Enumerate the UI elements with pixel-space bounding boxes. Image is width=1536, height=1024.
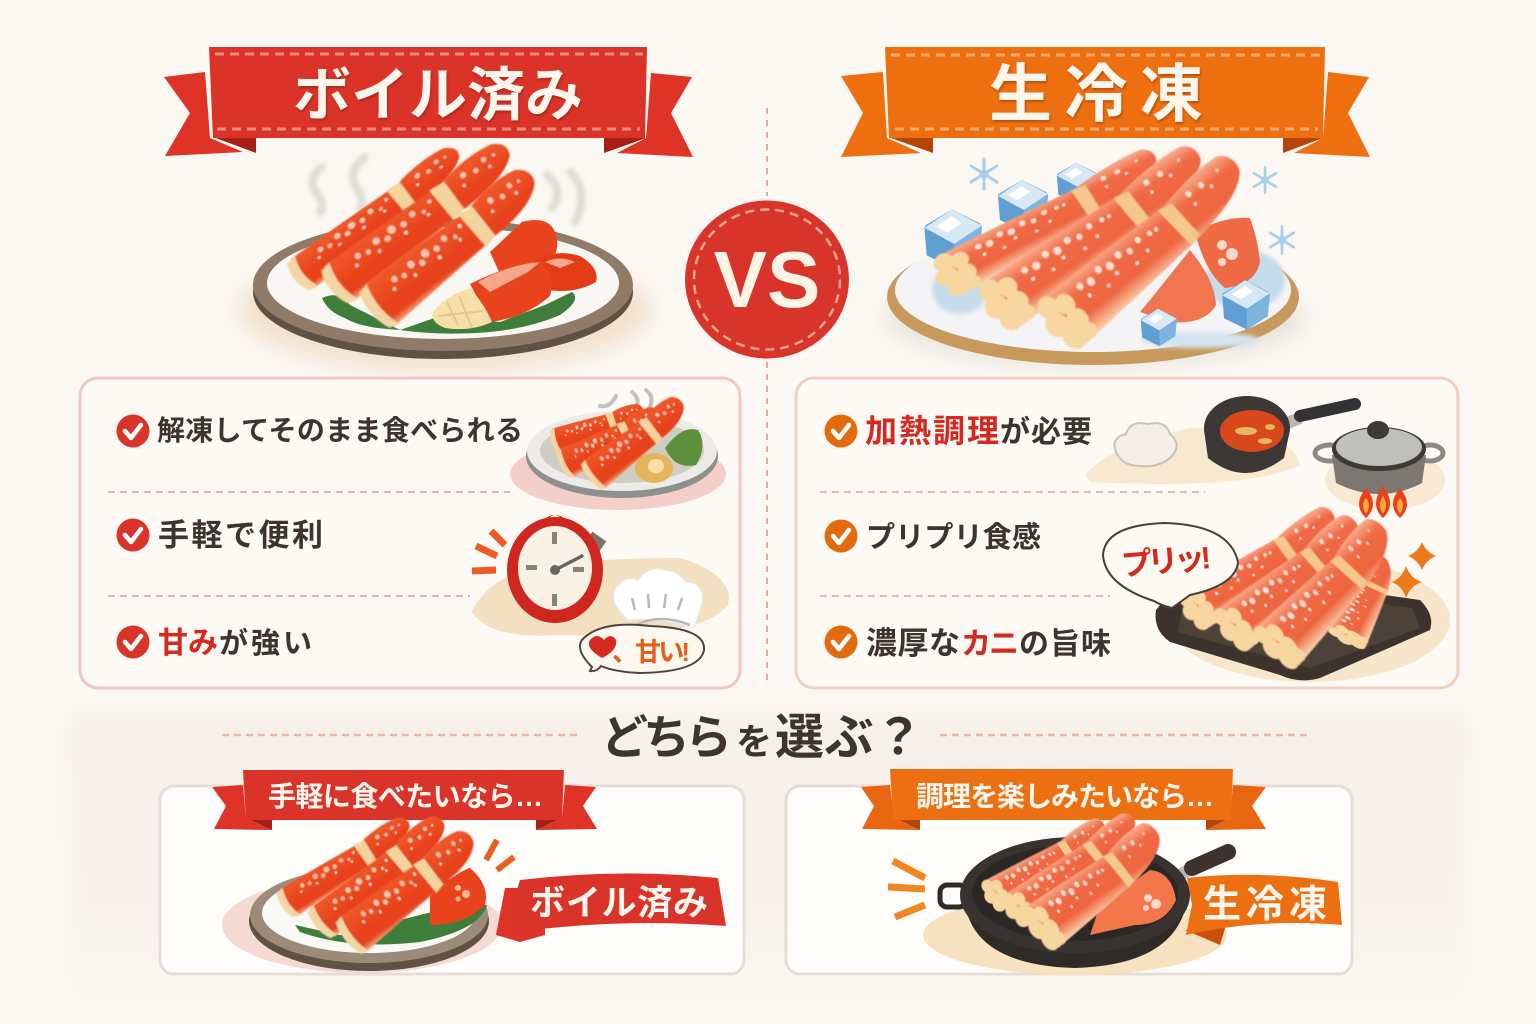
text: cooking required <box>865 413 1092 449</box>
text: strong sweetness: 甘み <box>158 627 218 660</box>
text: texture: プリプリ食感 <box>866 521 1041 554</box>
icon: heart <box>589 636 616 658</box>
ribbon: frozen <box>1185 875 1342 945</box>
badge: VS <box>685 200 849 358</box>
icon: saucepan <box>1204 396 1355 473</box>
callout: pripuri: プリッ! <box>1120 540 1212 583</box>
illustration: stopwatch <box>472 515 729 636</box>
text: rich flavor: 濃厚な <box>866 626 960 661</box>
ice cubes behind <box>924 159 1294 269</box>
ribbon: easy to eat <box>212 770 597 830</box>
ribbon: boiled <box>496 873 726 942</box>
card: boiled recommendation <box>160 770 744 974</box>
illustration: pan and pot <box>1085 396 1445 518</box>
heading: boiled: ボイル済み <box>293 63 583 128</box>
text: strong sweetness: が強い <box>219 626 312 660</box>
banner: frozen <box>841 47 1370 157</box>
center dashed divider <box>766 108 768 684</box>
text: rich flavor: カニ <box>961 628 1019 661</box>
check: cooking required <box>824 414 858 448</box>
heading: which to choose: 選ぶ？ <box>775 711 923 765</box>
check: texture <box>824 520 858 552</box>
text: easy: 手軽で便利 <box>158 518 323 553</box>
heading: which to choose: どちら <box>601 711 732 764</box>
text: cooking required: が必要 <box>1000 415 1092 449</box>
text: sweet: 、甘い! <box>612 637 690 667</box>
text: strong sweetness <box>158 626 312 660</box>
panel: boiled features <box>80 378 740 688</box>
panel: frozen features <box>796 378 1458 688</box>
icon: steam cloud <box>1114 423 1177 466</box>
icon: pot <box>1315 421 1443 494</box>
text: cooking required: 加熱調理 <box>865 413 999 449</box>
text: rich flavor: の旨味 <box>1019 628 1111 661</box>
illustration: boiled crab plate <box>240 136 650 370</box>
check: thaw and eat <box>116 414 150 448</box>
ice cubes front <box>1141 280 1270 346</box>
illustration: frying pan <box>888 809 1228 975</box>
illustration: boiled plate small <box>222 811 514 973</box>
illustration: frozen crab plate <box>885 139 1305 366</box>
rear claw pieces <box>1195 218 1260 288</box>
heading: frozen: 生冷凍 <box>989 60 1203 130</box>
ribbon: easy to eat: 手軽に食べたいなら… <box>268 781 543 812</box>
ribbon: frozen: 生冷凍 <box>1203 884 1327 926</box>
icon: flames <box>1359 486 1407 518</box>
illustration: crab on tray <box>1103 502 1450 682</box>
check: rich flavor <box>824 626 858 658</box>
text: thaw and eat: 解凍してそのまま食べられる <box>157 415 523 446</box>
check: easy <box>116 518 150 552</box>
illustration: chef hat and speech bubble <box>580 569 704 673</box>
check: sweet <box>116 626 150 658</box>
text: rich flavor <box>866 626 1111 661</box>
banner: boiled <box>164 47 693 157</box>
illustration: small plate <box>510 390 726 510</box>
ribbon: enjoy cooking <box>861 769 1266 830</box>
badge: VS: VS <box>714 235 820 324</box>
leaves <box>322 292 575 334</box>
heading: which to choose <box>222 711 1312 765</box>
callout: pripuri <box>1103 523 1238 608</box>
bottom section band <box>70 714 1466 1014</box>
ribbon: enjoy cooking: 調理を楽しみたいなら… <box>916 781 1214 812</box>
card: frozen recommendation <box>786 769 1352 975</box>
ribbon: boiled: ボイル済み <box>530 884 708 923</box>
heading: which to choose: を <box>736 721 772 762</box>
icon: sparkles <box>1392 542 1436 598</box>
